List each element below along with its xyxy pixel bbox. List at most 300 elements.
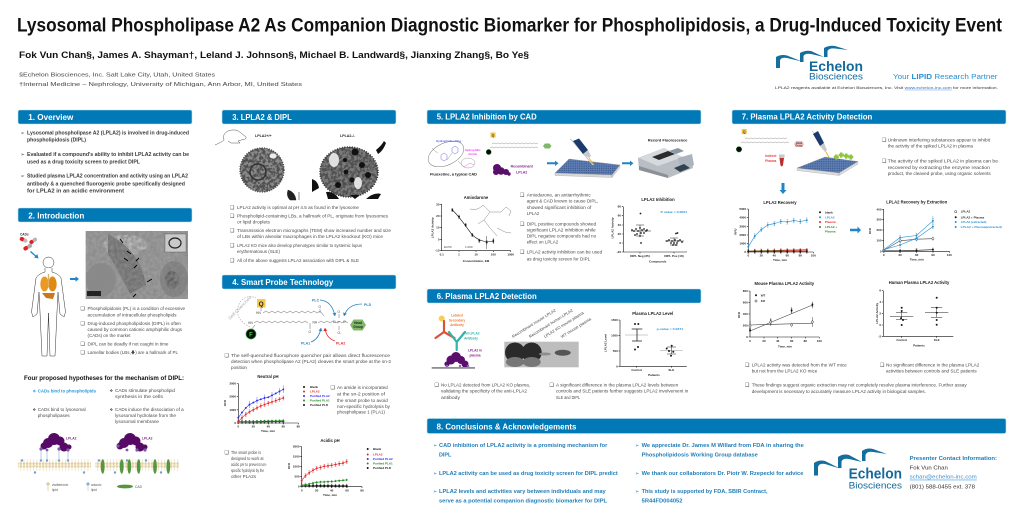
text block: amide note: phospholipase 1 (PLA1) — [337, 410, 385, 415]
chart: LPLA2 recovery by extraction: LPLA2 + Plasma — [961, 215, 984, 219]
chart: LPLA2 recovery by extraction: 0 — [883, 253, 885, 257]
chart: neutral pH: Purified PLA2 — [310, 394, 330, 398]
text block: detection left: validating the specificity of the anti-LPLA2 — [441, 388, 527, 394]
chart: mouse plasma LPLA2 activity: 400 — [743, 312, 748, 316]
chart: acidic pH: Blank — [373, 447, 382, 451]
heading: inhibition: 5. LPLA2 Inhibition by CAD — [437, 112, 537, 122]
diagram: probe with plasma: Q — [743, 130, 746, 134]
chart: amiodarone dose response: Amiodarone — [464, 195, 489, 200]
text block: LPLA2 findings: LPLA2 KO mice also develop phenotypes similar to systemic lupus — [237, 243, 363, 248]
labels: blot lanes: Recombinant human LPLA2 — [528, 307, 574, 339]
panel: 8. Conclusions & Acknowledgements — [427, 418, 1006, 505]
text block: amide note: non-specific hydrolysis by — [337, 404, 391, 409]
chart: plasma LPLA2 level: 1000 — [611, 333, 618, 337]
panel: 3. LPLA2 & DIPL — [215, 110, 396, 264]
chart: plasma LPLA2 level — [604, 311, 687, 377]
icon: recombinant LPLA2 — [493, 164, 534, 176]
text block: human finding — [880, 362, 980, 374]
heading: plasma detection: 6. Plasma LPLA2 Detection — [437, 291, 537, 301]
panel: 1. Overview — [18, 110, 192, 195]
chart: mouse plasma LPLA2 activity: Mouse Plasma LPLA2 Activity — [754, 281, 815, 286]
text block: interference conclusion: ❑ — [745, 383, 749, 389]
text block: introduction bullets: ❑ — [80, 306, 85, 312]
arrow: to plate — [547, 161, 558, 166]
text block: human finding: activities between controls and SLE patients — [886, 369, 977, 374]
text block: introduction bullets: Drug-induced phospholipidosis (DIPL) is often — [88, 321, 181, 326]
text block: interference: Unknown interfering substances appear to inhibit — [888, 138, 991, 143]
text block: detection right: SLE and DIPL — [556, 395, 580, 400]
text block: LPLA2 findings: All of the above suggests LPLA2 association with DIPL & SLE — [237, 258, 359, 263]
chart: LPLA2 recovery by extraction: 30 — [898, 253, 902, 257]
text block: detection right: controls and SLE patients further suggests LPLA2 involvement in — [556, 388, 689, 394]
diagram: antibody sandwich: Labeled — [451, 314, 463, 318]
chart: acidic pH: Purified PLD — [373, 466, 392, 470]
icon: CAD capsules — [19, 233, 38, 251]
logo: Echelon Biosciences header: Biosciences — [809, 72, 864, 82]
text block: presenter contact: Fok Vun Chan — [910, 466, 948, 472]
chart: LPLA2 inhibition scatter: 20 — [618, 232, 621, 236]
legend: lipids and CAD: lipid — [91, 488, 97, 492]
text block: inhibition findings: LPLA2 — [527, 211, 540, 216]
text block: inhibition findings: Amiodarone, an antiarrhythmic — [527, 192, 591, 197]
icon: plasma tube — [765, 154, 784, 166]
chart: neutral pH: 80 — [297, 424, 300, 428]
chart: LPLA2 inhibition scatter: 60 — [618, 214, 621, 218]
chart: mouse plasma LPLA2 activity — [737, 281, 822, 348]
heading: conclusions: 8. Conclusions & Acknowledgements — [437, 421, 577, 431]
diagram: smart probe structure: O — [338, 310, 340, 314]
text block: hypotheses list: synthesis in the cells — [115, 394, 164, 399]
chart: mouse plasma LPLA2 activity: 0 — [749, 339, 751, 343]
chart: acidic pH: 500 — [294, 475, 300, 479]
logo: Echelon Biosciences footer: Biosciences — [849, 479, 902, 490]
text block: hypotheses list: CADs bind to phospholipids — [38, 389, 96, 394]
affiliations — [19, 72, 303, 88]
heading: activity detection: 7. Plasma LPLA2 Activity Detection — [742, 112, 872, 122]
text block: introduction bullets: (CADs) on the market — [88, 333, 131, 338]
text block: LPLA2 findings — [230, 205, 391, 264]
text block: hypotheses list: ❖ — [32, 389, 36, 394]
chart: LPLA2 recovery: LPLA2 Recovery — [763, 200, 797, 205]
text block: presenter contact: schan@echelon-inc.com — [910, 475, 977, 481]
chart: amiodarone dose response: 10 — [474, 252, 478, 256]
text block: inhibition findings: ❑ — [520, 250, 524, 256]
diagram: probe with plasma — [736, 129, 804, 152]
text block: conclusions — [433, 443, 618, 505]
chart: LPLA2 recovery by extraction: LPLA2 Recovery by Extraction — [886, 199, 948, 204]
diagram: smart probe structure: HN — [256, 311, 261, 315]
text block: hypotheses list: CADs bind to lysosomal — [38, 407, 86, 412]
chart: LPLA2 inhibition scatter: 80 — [618, 205, 621, 209]
text block: acknowledgements: ➢ — [635, 471, 639, 477]
panel: 5. LPLA2 Inhibition by CAD — [424, 110, 701, 264]
text block: hypotheses list: ❖ — [110, 388, 114, 393]
chart: LPLA2 recovery: 40 — [773, 254, 776, 258]
chart: acidic pH: 0 — [298, 485, 300, 489]
icon: plasma tube: Plasma — [765, 159, 777, 163]
text block: inhibition findings: DIPL negative compounds had no — [527, 234, 597, 239]
diagram: antibody sandwich: Secondary — [449, 318, 465, 322]
text block: presenter contact: Presenter Contact Information: — [910, 456, 997, 462]
chart: mouse plasma LPLA2 activity: 80 — [804, 339, 807, 343]
chart: neutral pH — [223, 374, 330, 433]
diagram: probe with plasma: Head — [796, 141, 803, 145]
chart: neutral pH: Purified PLD — [310, 403, 329, 407]
text block: LPLA2 findings: ❑ — [230, 258, 234, 264]
chart: neutral pH: 40 — [267, 424, 270, 428]
image: wild type macrophage — [238, 146, 299, 200]
chart: LPLA2 inhibition scatter: 40 — [618, 223, 621, 227]
text block: LPLA2 findings: Phospholipid-containing LBs, a hallmark of PL, originate from lysosomes — [237, 214, 389, 219]
text block: inhibition findings: showed significant inhibition of — [527, 205, 592, 210]
text block: amide note: at the sn-2 position of — [337, 392, 386, 396]
heading: conclusions — [427, 418, 1006, 434]
chart: LPLA2 inhibition scatter: LPLA2 Activity — [610, 217, 614, 239]
chart: amiodarone dose response: 1000 — [507, 252, 514, 256]
text block: overview bullets: Studied plasma LPLA2 concentration and activity using an LPLA2 — [27, 174, 188, 180]
text block: inhibition findings: ❑ — [520, 192, 524, 198]
text block: hypotheses list: CADs induce the dissociation of a — [115, 407, 184, 412]
chart: acidic pH: RFU — [287, 463, 291, 469]
text block: introduction bullets — [80, 306, 185, 356]
chart: human plasma LPLA2 activity: -2 — [878, 334, 881, 338]
text block: interference conclusion — [745, 383, 967, 394]
chart: LPLA2 recovery: 2000 — [739, 233, 746, 237]
text block: conclusions: CAD inhibition of LPLA2 activity is a promising mechanism for — [439, 443, 608, 449]
text block: hypotheses list: lysosomal hydrolase from the — [115, 413, 176, 418]
arrow: capsule to body — [30, 251, 38, 258]
chart: LPLA2 recovery: Plasma — [825, 220, 836, 224]
text block: conclusions: ➢ — [433, 443, 437, 449]
heading: overview — [18, 110, 192, 124]
text block: hypotheses list: ❖ — [32, 407, 36, 412]
text block: LPLA2 findings: ❑ — [230, 214, 234, 220]
chart: acidic pH: 40 — [330, 489, 334, 493]
text block: inhibition findings: ❑ — [520, 221, 524, 227]
chart: LPLA2 recovery: 3000 — [739, 224, 746, 228]
diagram: smart probe structure: O — [308, 330, 312, 334]
arrow: down to charts — [780, 183, 786, 194]
text block: detection right: ❑ — [550, 383, 554, 389]
chart: LPLA2 recovery: RFU — [734, 229, 738, 235]
chart: human plasma LPLA2 activity: Human Plasma LPLA2 Activity — [889, 280, 950, 285]
chart: neutral pH: Purified PLA1 — [310, 398, 330, 402]
heading: smart probe: 4. Smart Probe Technology — [232, 277, 333, 287]
chart: amiodarone dose response — [430, 195, 514, 263]
icon: human body with organs — [32, 257, 66, 356]
chart: plasma LPLA2 level: Patients — [648, 373, 660, 377]
legend: lipids and CAD: anionic — [91, 483, 102, 487]
heading: LPLA2 and DIPL — [222, 110, 396, 124]
chart: LPLA2 recovery by extraction: 90 — [931, 253, 935, 257]
text block: introduction bullets: accumulation of intracellular phospholipids — [88, 312, 177, 317]
affiliations: †Internal Medicine – Nephrology, University of Michigan, Ann Arbor, MI, United States — [19, 82, 303, 88]
chart: human plasma LPLA2 activity: 6 — [879, 289, 881, 293]
diagram: smart probe structure — [227, 294, 366, 339]
reagents note: LPLA2 reagents available at Echelon Biosciences, Inc. Visit www.echelon-inc.com for more information. — [775, 86, 998, 90]
chart: acidic pH: 0 — [301, 489, 303, 493]
text block: acidic pH note: acidic pH to prevent non- — [231, 462, 267, 467]
arrow: to plate reader — [622, 161, 634, 166]
text block: overview bullets: Lysosomal phospholipase A2 (LPLA2) is involved in drug-induced — [27, 130, 189, 136]
chart: neutral pH: LPLA2 — [310, 390, 320, 394]
text block: interference: the activity of the spiked LPLA2 in plasma — [888, 144, 973, 149]
chart: acidic pH: Purified PLA2 — [373, 457, 393, 461]
diagram: LPLA2 on membrane with CAD: LPLA2 — [142, 436, 153, 440]
diagram: antibody sandwich — [432, 314, 482, 369]
image: lamellar body micrograph — [86, 231, 188, 299]
chart: acidic pH: 60 — [345, 489, 349, 493]
icon: plate and pipette — [555, 138, 620, 178]
diagram: antibody sandwich: Anti LPLA2 — [462, 331, 480, 335]
text block: overview bullets: ➢ — [20, 130, 25, 136]
text block: acidic pH note: designed to work at — [231, 456, 264, 461]
chart: LPLA2 recovery by extraction: RFU — [868, 228, 872, 234]
text block: acidic pH note: The smart probe is — [231, 450, 262, 455]
text block: probe description: The self-quenched fluorophore quencher pair allows direct fluorescence — [231, 353, 390, 358]
chart: LPLA2 recovery by extraction: 200 — [876, 228, 882, 232]
text block: conclusions: serve as a potential companion diagnostic biomarker for DIPL — [439, 499, 608, 505]
icon: recombinant LPLA2: LPLA2 — [516, 170, 527, 174]
diagram: smart probe structure: HN — [248, 321, 253, 325]
chart: amiodarone dose response: LPLA2 Activity — [430, 217, 434, 238]
legend: lipids and CAD: zwitterionic — [52, 483, 69, 487]
heading: introduction: 2. Introduction — [28, 210, 84, 220]
text block: inhibition findings: agent & CAD known to cause DIPL, — [527, 199, 598, 204]
chart: LPLA2 recovery by extraction: LPLA2 — [961, 210, 971, 214]
text block: presenter contact — [910, 456, 997, 490]
image: western blot — [504, 342, 579, 367]
chart: LPLA2 recovery by extraction: 300 — [876, 217, 882, 221]
text block: mouse finding: LPLA2 activity was detected from the WT mice — [752, 362, 847, 367]
diagram: fluoxetine: Hydrophilic — [465, 148, 481, 152]
diagram: smart probe structure: NH — [312, 320, 318, 324]
diagram: probe with plasma: Group — [795, 144, 803, 147]
text block: conclusions: LPLA2 levels and activities vary between individuals and may — [439, 489, 607, 495]
diagram: smart probe structure: Q — [259, 301, 264, 308]
text block: detection right — [550, 383, 689, 400]
image: knockout macrophage — [312, 141, 386, 199]
chart: neutral pH: 0 — [237, 424, 239, 428]
chart: mouse plasma LPLA2 activity: 20 — [762, 339, 766, 343]
chart: LPLA2 inhibition scatter: DIPL Pos (16) — [664, 254, 684, 258]
chart: amiodarone dose response: 100 — [491, 252, 496, 256]
text block: human finding: No significant difference in the plasma LPLA2 — [886, 362, 980, 367]
chart: neutral pH: Neutral pH — [257, 374, 279, 379]
text block: inhibition findings: as drug toxicity screen for DIPL — [527, 256, 591, 261]
legend: lipids and CAD — [47, 483, 143, 492]
chart: amiodarone dose response: 0.1 — [440, 252, 444, 256]
icon: plate reader — [638, 148, 694, 178]
chart: human plasma LPLA2 activity: Control — [896, 338, 907, 342]
chart: plasma LPLA2 level: Control — [631, 368, 642, 372]
logo: Echelon Biosciences footer: Echelon — [849, 467, 902, 483]
chart: human plasma LPLA2 activity: LPLA2 Activity — [875, 302, 879, 324]
chart: LPLA2 inhibition scatter: LPLA2 Inhibition — [641, 197, 675, 202]
text block: LPLA2 findings: erythematosus (SLE) — [237, 249, 280, 254]
icon: plate with pipette and fluorescence — [797, 131, 858, 176]
text block: probe description: position — [231, 365, 247, 370]
label: knockout: LPLA2-/- — [340, 134, 356, 138]
chart: plasma LPLA2 level: p-value = 0.0371 — [657, 327, 684, 331]
diagram: fluoxetine: Hydrophobic Ring — [436, 139, 461, 143]
heading: inhibition — [427, 110, 701, 124]
text block: mouse finding: ❑ — [745, 362, 749, 368]
text block: acknowledgements: Phospholipidosis Working Group database — [642, 453, 758, 459]
chart: acidic pH: 20 — [315, 489, 319, 493]
chart: mouse plasma LPLA2 activity: 800 — [743, 289, 748, 293]
chart: LPLA2 inhibition scatter: Compounds — [649, 260, 667, 264]
text block: mouse finding — [745, 362, 847, 374]
text block: detection right: A significant difference in the plasma LPLA2 levels between — [556, 383, 679, 388]
panel: 2. Introduction — [18, 208, 192, 492]
text block: interference: product, the cleaved probe, using organic solvents — [888, 171, 991, 176]
text block: acknowledgements: ➢ — [635, 489, 639, 495]
affiliations: §Echelon Biosciences, Inc. Salt Lake City, Utah, United States — [19, 72, 216, 78]
chart: LPLA2 recovery: 5000 — [739, 207, 746, 211]
diagram: smart probe structure: O- — [338, 331, 341, 335]
chart: plasma LPLA2 level: SLE — [668, 368, 674, 372]
text block: introduction bullets: DIPL can be deadly if not caught in time — [88, 342, 169, 347]
arrow: recovery to extraction — [850, 226, 861, 234]
arrows: enzyme cleavage sites: PLA1 — [301, 342, 310, 346]
text block: LPLA2 findings: or lipid droplets — [237, 219, 271, 224]
text block: LPLA2 findings: of LBs within alveolar macrophages in the LPLA2 knockout (KO) mice — [237, 234, 383, 239]
text block: overview bullets: phospholipidosis (DIPL) — [27, 138, 86, 144]
chart: amiodarone dose response: 20 — [436, 214, 440, 218]
text block: hypotheses list: lysosomal membrane — [115, 419, 159, 424]
text block: LPLA2 findings: ❑ — [230, 228, 234, 234]
chart: amiodarone dose response: EC50 — [444, 245, 452, 249]
heading: LPLA2 and DIPL: 3. LPLA2 & DIPL — [232, 112, 292, 122]
chart: LPLA2 recovery: 20 — [760, 254, 763, 258]
arrows: enzyme cleavage sites: PLC — [312, 298, 320, 302]
chart: mouse plasma LPLA2 activity: 600 — [743, 300, 748, 304]
text block: acknowledgements: 5R44FD004052 — [642, 499, 682, 505]
diagram: smart probe structure: O — [333, 320, 336, 324]
text block: amide note — [330, 385, 391, 415]
logo: Echelon Biosciences header: Echelon — [809, 58, 863, 74]
chart: LPLA2 inhibition scatter: 0 — [619, 241, 621, 245]
diagram: smart probe structure: P — [338, 320, 340, 324]
chart: neutral pH: Blank — [310, 385, 318, 389]
chart: neutral pH: 1000 — [229, 408, 236, 412]
text block: conclusions: ➢ — [433, 471, 437, 477]
chart: LPLA2 inhibition scatter: P value < 0.0001 — [661, 210, 688, 214]
text block: overview bullets: antibody & a quenched fluorogenic probe specifically designed — [27, 181, 185, 187]
text block: interference: ❑ — [882, 138, 886, 144]
chart: LPLA2 recovery by extraction: 60 — [915, 253, 919, 257]
panel: 6. Plasma LPLA2 Detection — [427, 289, 701, 400]
chart: mouse plasma LPLA2 activity: KO — [761, 299, 766, 303]
chart: LPLA2 recovery: 1000 — [739, 241, 746, 245]
text block: acknowledgements: ➢ — [635, 443, 639, 449]
chart: acidic pH: LPLA2 — [373, 452, 383, 456]
chart: LPLA2 recovery: 0 — [747, 254, 749, 258]
heading: smart probe — [222, 275, 396, 289]
diagram: antibody sandwich: Antibody — [450, 323, 464, 327]
chart: human plasma LPLA2 activity — [875, 280, 953, 347]
chart: mouse plasma LPLA2 activity: Time, min — [778, 344, 792, 348]
panel: 4. Smart Probe Technology — [222, 275, 396, 497]
chart: LPLA2 recovery: 0 — [744, 250, 746, 254]
chart: LPLA2 recovery: 100 — [811, 254, 816, 258]
chart: LPLA2 recovery: 80 — [799, 254, 802, 258]
text block: inhibition findings: LPLA2 activity inhibition can be used — [527, 250, 603, 255]
text block: conclusions: LPLA2 activity can be used as drug toxicity screen for DIPL predict — [439, 471, 618, 477]
text block: overview bullets: Evaluated if a compound's ability to inhibit LPLA2 activity can be — [27, 152, 189, 158]
chart: human plasma LPLA2 activity: 0 — [879, 323, 881, 327]
chart: amiodarone dose response: 30 — [436, 202, 440, 206]
chart: LPLA2 recovery: LPLA2 + — [825, 225, 837, 229]
chart: LPLA2 recovery: 4000 — [739, 216, 746, 220]
chart: plasma LPLA2 level: 1500 — [611, 318, 618, 322]
text block: interference: recovered by extracting the enzyme reaction — [888, 165, 990, 170]
text block: interference: ❑ — [882, 159, 886, 165]
chart: mouse plasma LPLA2 activity: WT — [761, 293, 766, 297]
text block: acknowledgements — [635, 443, 804, 505]
chart: neutral pH: 2000 — [229, 395, 236, 399]
diagram: smart probe structure: Group — [353, 325, 363, 329]
heading: hypotheses: Four proposed hypotheses for the mechanism of DIPL: — [24, 375, 184, 382]
chart: LPLA2 inhibition scatter — [610, 197, 688, 264]
chart: amiodarone dose response: 1 — [458, 252, 460, 256]
chart: amiodarone dose response: 0 — [438, 237, 440, 241]
text block: hypotheses list: CADs stimulate phospholipid — [115, 388, 175, 393]
text block: detection left: No LPLA2 detected from LPLA2 KO plasma, — [441, 383, 530, 388]
arrows: enzyme cleavage sites: PLD — [364, 303, 372, 307]
diagram: smart probe structure: O — [318, 305, 322, 309]
chart: human plasma LPLA2 activity: Patients — [913, 343, 925, 347]
diagram: smart probe structure: Self-Quenched — [227, 294, 253, 321]
icon: CAD capsules: CADs — [20, 233, 29, 237]
diagram: antibody sandwich: plasma — [470, 354, 481, 358]
text block: interference conclusion: development is necessary to accurately measure LPLA2 activity in biological samples. — [752, 389, 926, 394]
diagram: smart probe structure: F — [249, 332, 253, 338]
chart: acidic pH: Acidic pH — [320, 438, 340, 443]
icon: mouse outline — [215, 130, 246, 145]
text block: introduction bullets: ❑ — [80, 342, 85, 348]
chart: mouse plasma LPLA2 activity: 200 — [743, 324, 748, 328]
diagram: smart probe structure: Head — [354, 321, 362, 325]
text block: LPLA2 findings: ❑ — [230, 205, 234, 211]
chart: LPLA2 recovery: Plasma — [825, 229, 836, 233]
text block: amide note: An amide is incorporated — [337, 385, 388, 390]
chart: neutral pH: 20 — [252, 424, 255, 428]
chart: amiodarone dose response: 1.000 — [465, 245, 473, 249]
text block: amide note: the smart probe to avoid — [337, 398, 388, 403]
diagram: fluoxetine — [424, 136, 481, 177]
text block: overview bullets: ➢ — [20, 174, 25, 180]
text block: presenter contact: (801) 588-0455 ext. 378 — [910, 484, 975, 490]
chart: LPLA2 recovery by extraction: Time, min — [910, 258, 924, 262]
chart: mouse plasma LPLA2 activity: RFU — [737, 312, 741, 318]
labels: blot lanes: WT mouse plasma — [560, 316, 593, 339]
text block: inhibition findings: effect on LPLA2 — [527, 240, 559, 245]
logo: Echelon Biosciences header — [776, 46, 864, 82]
heading: plasma detection — [427, 289, 701, 303]
chart: neutral pH: 0 — [234, 421, 236, 425]
panel: 7. Plasma LPLA2 Activity Detection — [732, 110, 1006, 394]
text block: acidic pH note: other PLA2s — [231, 474, 257, 479]
chart: plasma LPLA2 level: 0 — [616, 364, 618, 368]
text block: probe description — [224, 353, 391, 370]
chart: LPLA2 recovery by extraction: 120 — [947, 253, 952, 257]
text block: inhibition findings: significant LPLA2 inhibition while — [527, 228, 596, 233]
text block: mouse finding: but not from the LPLA2 KO mice — [752, 369, 818, 374]
icon: plasma tube: Indirect — [765, 154, 777, 158]
text block: LPLA2 findings: ❑ — [230, 243, 234, 249]
